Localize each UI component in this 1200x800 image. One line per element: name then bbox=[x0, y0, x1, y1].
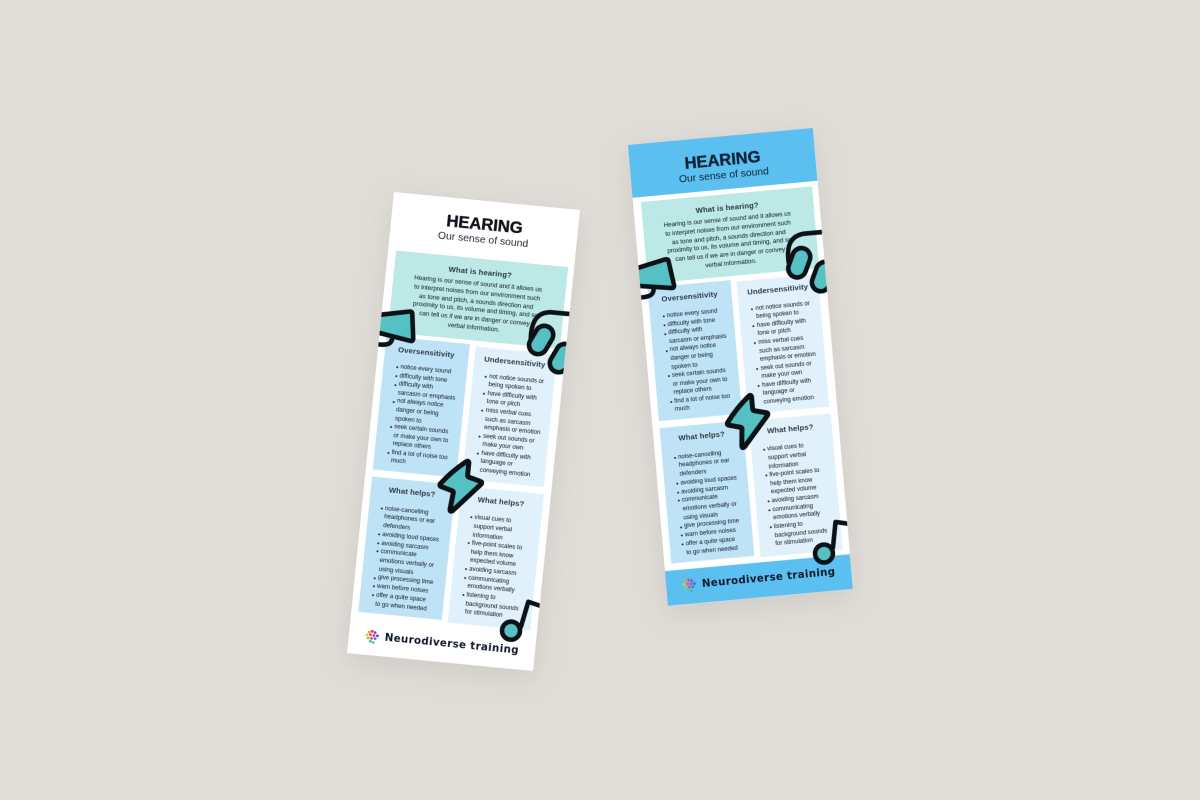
list: spoken to bbox=[395, 415, 422, 424]
list: much bbox=[390, 458, 406, 466]
panel: what helps oversensitivity bbox=[659, 421, 754, 564]
list: offer a quite space bbox=[685, 536, 735, 547]
list: for stimulation bbox=[775, 537, 813, 547]
list: avoiding loud spaces bbox=[382, 531, 439, 543]
list: offer a quite space bbox=[376, 591, 426, 603]
list: tone or pitch bbox=[757, 327, 791, 337]
text block: proximity to us, its volume and timing, and so bbox=[667, 237, 792, 255]
list bbox=[372, 504, 439, 612]
list: spoken to bbox=[671, 361, 698, 370]
list: make your own bbox=[482, 441, 524, 452]
list: background sounds bbox=[774, 527, 828, 539]
list: seek certain sounds bbox=[394, 423, 449, 436]
header band bbox=[628, 128, 818, 198]
icon: megaphone bbox=[634, 259, 675, 298]
list: sarcasm or emphasis bbox=[397, 389, 456, 402]
list: being spoken to bbox=[488, 381, 532, 393]
list: much bbox=[675, 405, 690, 413]
list: emotions verbally bbox=[773, 510, 820, 521]
list: difficulty with tone bbox=[399, 372, 448, 384]
footer band bbox=[665, 554, 853, 606]
list: using visuals bbox=[378, 565, 414, 576]
list: using visuals bbox=[683, 511, 718, 521]
icon: headphones bbox=[523, 310, 581, 377]
list: miss verbal cues bbox=[485, 407, 531, 418]
list: warn before noises bbox=[377, 583, 429, 595]
heading: What helps? bbox=[388, 485, 436, 499]
text block bbox=[663, 211, 792, 269]
list: emphasis or emotion bbox=[760, 351, 816, 363]
list: five-point scales to bbox=[471, 540, 522, 551]
list: emotions verbally or bbox=[682, 500, 737, 512]
list bbox=[387, 364, 456, 466]
list: noise-cancelling bbox=[385, 504, 429, 516]
list: avoiding sarcasm bbox=[681, 484, 728, 495]
text block: can tell us if we are in danger or convey bbox=[675, 246, 785, 263]
list bbox=[662, 308, 730, 413]
panel: what is hearing bbox=[387, 250, 568, 348]
list: headphones or ear bbox=[679, 457, 730, 469]
icons overlay bbox=[378, 309, 570, 642]
list: miss verbal cues bbox=[758, 335, 804, 346]
text block: proximity to us, its volume and timing, and so bbox=[413, 301, 538, 320]
list: difficulty with tone bbox=[667, 316, 715, 328]
panel: oversensitivity bbox=[647, 280, 742, 421]
list: help them know bbox=[471, 548, 514, 559]
list: emotions verbally or bbox=[379, 557, 434, 569]
text block: verbal information. bbox=[447, 322, 500, 334]
icon: megaphone bbox=[374, 309, 416, 348]
list: communicating bbox=[468, 574, 509, 585]
panel: undersensitivity bbox=[462, 346, 557, 486]
text block: to interpret noises from our environment such bbox=[665, 219, 791, 238]
list: or make your own to bbox=[672, 375, 728, 387]
list: seek out sounds or bbox=[760, 360, 812, 371]
list: support verbal bbox=[473, 522, 512, 533]
list: defenders bbox=[383, 522, 411, 531]
list: tone or pitch bbox=[486, 398, 520, 409]
subtitle: Our sense of sound bbox=[437, 230, 529, 250]
heading: What is hearing? bbox=[448, 265, 512, 280]
brand name: Neurodiverse training bbox=[701, 566, 836, 590]
list: have difficulty with bbox=[757, 317, 806, 329]
list bbox=[674, 449, 739, 556]
heading: Undersensitivity bbox=[747, 282, 808, 296]
heading: What is hearing? bbox=[695, 200, 759, 215]
list: visual cues to bbox=[767, 442, 804, 453]
list: notice every sound bbox=[667, 308, 718, 319]
list: danger or being bbox=[670, 351, 713, 362]
list: headphones or ear bbox=[384, 513, 435, 525]
list: have difficulty with bbox=[487, 390, 537, 402]
list: difficulty with bbox=[668, 326, 703, 336]
text block: Hearing is our sense of sound and it allows us bbox=[663, 211, 791, 229]
list: replace others bbox=[392, 441, 431, 451]
text block: Hearing is our sense of sound and it allows us bbox=[414, 275, 542, 294]
brand name: Neurodiverse training bbox=[384, 632, 519, 657]
heading: What helps? bbox=[477, 495, 525, 508]
panel: undersensitivity bbox=[736, 274, 829, 414]
list: find a lot of noise too bbox=[391, 449, 448, 461]
list: warn before noises bbox=[685, 527, 736, 538]
icon: headphones bbox=[782, 231, 839, 297]
icon: music note bbox=[812, 521, 853, 563]
list: expected volume bbox=[771, 484, 817, 496]
list: seek certain sounds bbox=[672, 367, 726, 379]
panel: what helps undersensitivity bbox=[748, 413, 842, 557]
list: avoiding sarcasm bbox=[469, 565, 517, 577]
list: difficulty with bbox=[398, 381, 433, 391]
list: avoiding loud spaces bbox=[680, 474, 737, 486]
list bbox=[750, 300, 816, 405]
list: replace others bbox=[673, 385, 712, 396]
list: communicating bbox=[772, 502, 813, 513]
list: information bbox=[472, 531, 503, 541]
title: HEARING bbox=[446, 211, 524, 238]
list: background sounds bbox=[465, 600, 519, 612]
list: listening to bbox=[774, 520, 803, 530]
list: expected volume bbox=[470, 557, 516, 568]
list: listening to bbox=[466, 591, 496, 601]
list: emphasis or emotion bbox=[484, 424, 541, 436]
list: not notice sounds or bbox=[489, 373, 544, 385]
list: have difficulty with bbox=[481, 450, 531, 461]
icon: lightning bolt bbox=[437, 459, 484, 514]
list: language or bbox=[480, 458, 513, 468]
list: have difficulty with bbox=[762, 377, 811, 388]
list: visual cues to bbox=[474, 514, 512, 524]
heading: What helps? bbox=[678, 429, 725, 443]
list: to go when needed bbox=[375, 600, 427, 612]
card: white hearing leaflet bbox=[347, 192, 580, 671]
panel: what helps undersensitivity bbox=[447, 486, 544, 630]
list: sarcasm or emphasis bbox=[669, 333, 727, 345]
list: conveying emotion bbox=[479, 467, 531, 479]
heading: What helps? bbox=[767, 422, 814, 435]
text block: as tone and pitch, a sounds direction and bbox=[672, 229, 786, 246]
list: notice every sound bbox=[400, 364, 452, 376]
text block: to interpret noises from our environment such bbox=[414, 283, 540, 303]
list: to go when needed bbox=[686, 544, 738, 556]
list: avoiding sarcasm bbox=[771, 493, 819, 504]
text block: can tell us if we are in danger or convey bbox=[419, 310, 530, 328]
list: avoiding sarcasm bbox=[381, 539, 429, 551]
list: being spoken to bbox=[756, 309, 799, 320]
list: make your own bbox=[761, 369, 803, 380]
list: give processing time bbox=[378, 574, 434, 586]
list: find a lot of noise too bbox=[674, 392, 730, 404]
text block bbox=[412, 274, 542, 334]
heading: Oversensitivity bbox=[398, 345, 455, 359]
icon: lightning bolt bbox=[725, 394, 771, 449]
list: danger or being bbox=[396, 406, 439, 417]
subtitle: Our sense of sound bbox=[679, 166, 769, 185]
list: five-point scales to bbox=[769, 467, 820, 478]
list bbox=[462, 514, 522, 619]
list: such as sarcasm bbox=[759, 343, 805, 354]
list bbox=[762, 442, 828, 547]
list bbox=[476, 373, 544, 479]
logo: brain dots bbox=[365, 630, 379, 644]
icon: music note bbox=[501, 600, 543, 642]
list: for stimulation bbox=[464, 609, 503, 619]
text block: as tone and pitch, a sounds direction and bbox=[419, 293, 534, 311]
list: support verbal bbox=[768, 451, 806, 461]
list: noise-cancelling bbox=[678, 449, 722, 460]
panel: what is hearing bbox=[640, 186, 819, 283]
list: defenders bbox=[679, 468, 707, 478]
list: not notice sounds or bbox=[755, 300, 810, 312]
list: help them know bbox=[770, 476, 813, 487]
heading: Undersensitivity bbox=[484, 354, 546, 369]
text block: verbal information. bbox=[705, 257, 757, 269]
panel: what helps oversensitivity bbox=[358, 476, 455, 620]
list: or make your own to bbox=[393, 432, 449, 444]
list: conveying emotion bbox=[763, 394, 814, 405]
heading: Oversensitivity bbox=[661, 289, 718, 303]
panel: oversensitivity bbox=[372, 336, 469, 478]
list: not always notice bbox=[669, 342, 716, 353]
list: such as sarcasm bbox=[485, 416, 531, 427]
list: information bbox=[768, 460, 799, 470]
title: HEARING bbox=[684, 147, 761, 173]
list: communicate bbox=[380, 548, 417, 558]
list: emotions verbally bbox=[467, 583, 515, 594]
list: not always notice bbox=[397, 398, 444, 409]
list: seek out sounds or bbox=[483, 433, 535, 445]
card: blue hearing leaflet bbox=[628, 128, 853, 606]
logo: brain dots bbox=[682, 578, 696, 592]
list: communicate bbox=[682, 493, 718, 504]
list: language or bbox=[763, 387, 795, 397]
icons overlay bbox=[638, 230, 848, 565]
list: give processing time bbox=[684, 518, 739, 530]
